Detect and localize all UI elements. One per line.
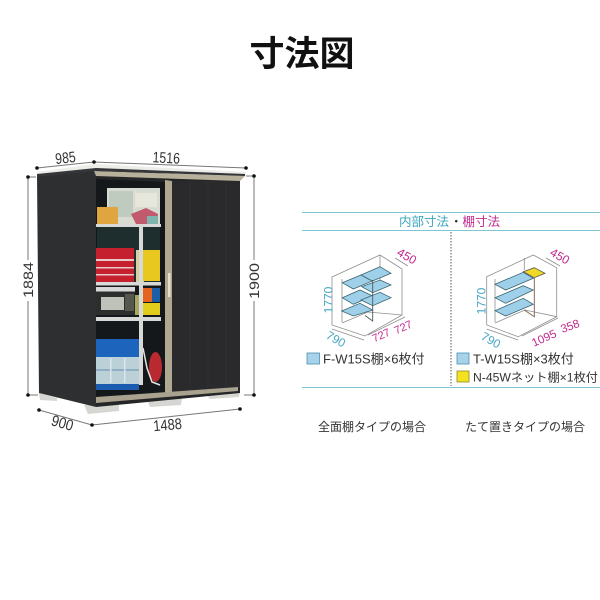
door bottom rail [96,387,238,403]
shed interior [96,179,166,397]
wireframe box [332,255,408,340]
diagram: full shelf type: 727 [393,319,414,337]
diagram: vertical type: 1095 [530,328,559,350]
diagram: vertical type: N-45Wネット棚×1枚付 [473,370,598,384]
caption: vertical type: たて置きタイプの場合 [465,420,585,434]
roof top surface [37,164,246,176]
red tool chest [96,248,134,282]
shed feet [39,391,240,414]
diagram: full shelf type [307,245,424,366]
dimension: 985: 985 [54,148,77,167]
yellow box [136,250,160,282]
shelf: yellow net [523,268,545,278]
diagram: vertical type: 358 [559,318,581,336]
roof trim [94,171,245,181]
legend [307,353,320,364]
labels: 1770 [321,286,335,313]
diagram: full shelf type: 727 [371,327,392,345]
shed dimensions [20,148,263,436]
shelf post [365,280,373,321]
diagram: vertical type: 790 [479,329,503,351]
blue storage cases [96,339,139,390]
upper shelf items [97,188,160,224]
wireframe box [487,255,560,340]
dimension: 1488: 1488 [153,416,183,436]
shelves: blue [495,272,533,316]
dimension: 1884: 1884 [21,262,37,298]
diagram: full shelf type: 450 [395,245,419,267]
shelves: blue [342,267,391,316]
shed side panel [37,169,96,407]
diagram: vertical type: 450 [548,245,572,267]
caption: full shelf type: 全面棚タイプの場合 [318,419,426,434]
diagram: full shelf type: 790 [324,328,348,350]
diagram: full shelf type: F-W15S棚×6枚付 [323,352,424,366]
shed illustration [37,164,246,414]
heading: 内部寸法・棚寸法 [399,214,501,229]
labels: 1770 [474,287,488,314]
sliding door [172,180,240,392]
diagram: vertical type [457,245,598,384]
shelves and post [96,224,161,385]
hose reel [143,348,162,385]
legend: shelf [457,353,469,364]
dimension: 900: 900 [49,413,75,435]
shelf post [524,278,534,317]
dimension: 1516: 1516 [152,148,181,167]
legend: net shelf [457,371,469,382]
dimension: 1900: 1900 [247,263,263,299]
small coloured bins [135,288,160,315]
shed front frame [96,169,240,407]
white gaps behind vertical dimensions [20,260,36,301]
toolbox on middle shelf [96,287,135,315]
door post [165,180,172,393]
title: 寸法図 [249,35,355,74]
diagram: vertical type: T-W15S棚×3枚付 [473,352,574,366]
